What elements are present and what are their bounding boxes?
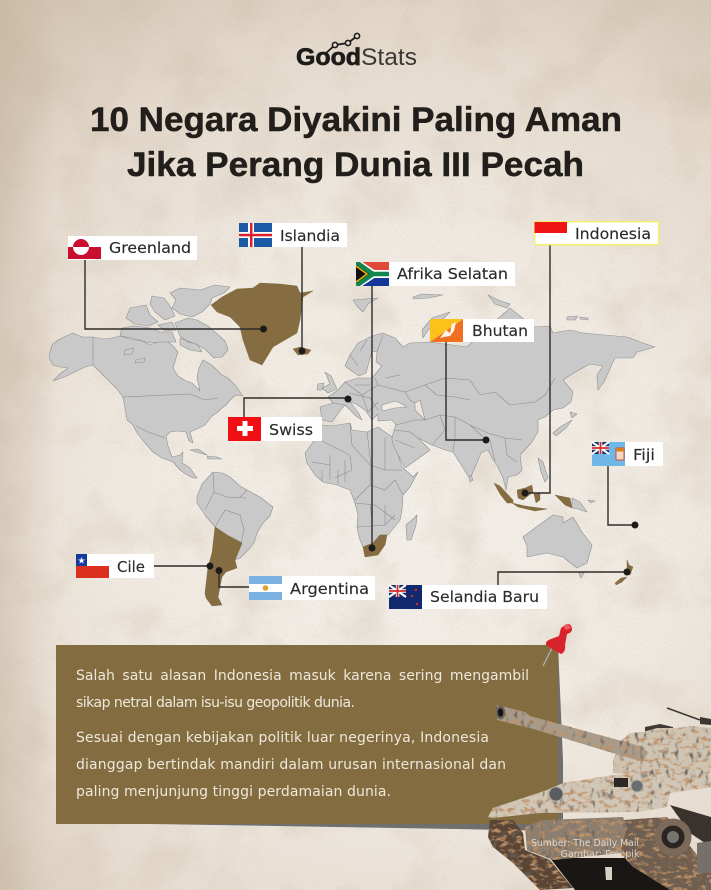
map: Greenland highlighted: [211, 283, 313, 365]
map: Australia: [523, 515, 592, 578]
tank: hatch: [614, 778, 628, 787]
text: second paragraph: Sesuai dengan kebijakan politik luar negerinya, Indonesia: [76, 730, 489, 746]
text: first paragraph: sikap netral dalam isu-isu geopolitik dunia.: [76, 695, 355, 711]
title: 10 Negara Diyakini Paling Aman: [90, 101, 622, 139]
source credit: [531, 838, 640, 860]
tank: cupola: [645, 724, 673, 733]
map: Canadian Arctic islands: [120, 285, 230, 363]
label: Bhutan: Bhutan: [472, 322, 528, 340]
map: Caribbean: [190, 449, 222, 459]
text: second paragraph: [76, 730, 506, 800]
panel shadow: [150, 645, 563, 831]
map: South America: [197, 472, 273, 560]
map: Japan: [553, 412, 577, 436]
label: Argentina: Argentina: [290, 580, 369, 598]
tank: antenna: [667, 708, 700, 720]
logo: GoodStats: Stats: [361, 44, 417, 71]
map: borders: [93, 335, 555, 543]
panel: explanation: [56, 645, 563, 831]
tank: right track: [620, 817, 711, 890]
map: UK and Ireland: [317, 372, 337, 393]
label: Fiji: Fiji: [633, 446, 655, 464]
source credit: Gambar: Freepik: [560, 849, 640, 860]
map: Iceland highlighted: [293, 347, 311, 355]
tank: rear wheels: [697, 841, 711, 873]
label: Islandia: [239, 223, 347, 354]
label: Cile: Cile: [117, 558, 145, 576]
logo: GoodStats: Good: [296, 44, 361, 71]
leader line: Greenland: [85, 259, 264, 329]
map: Papua New Guinea: [572, 498, 595, 512]
tank: upper right track: [670, 805, 711, 847]
label: Swiss: [228, 396, 352, 441]
text: first paragraph: Salah satu alasan Indonesia masuk karena sering mengambil: [76, 668, 529, 684]
map: Africa: [305, 423, 418, 547]
label: Cile: ★: [77, 556, 86, 566]
tank: headlights: [549, 787, 563, 801]
world map: [49, 283, 655, 606]
tank: undercarriage: [550, 858, 670, 890]
label: Afrika Selatan: Afrika Selatan: [397, 265, 508, 283]
illustration: rusty tank: [488, 705, 711, 890]
label: Argentina: [216, 567, 375, 600]
tank: hull deck: [488, 770, 711, 818]
tank: gap between wheels: [605, 867, 612, 880]
label: Indonesia: [522, 222, 659, 496]
map: Indonesia highlighted: [494, 483, 572, 511]
map: Madagascar: [406, 515, 417, 540]
label: Fiji: [592, 442, 663, 528]
text: second paragraph: dianggap bertindak mandiri dalam urusan internasional dan: [76, 757, 506, 773]
label: Cile: [76, 554, 214, 578]
text: second paragraph: paling menjunjung tinggi perdamaian dunia.: [76, 784, 391, 800]
tank: gun barrel: [497, 705, 648, 761]
icon: red push pin: [543, 624, 572, 666]
map: Philippines and Sri Lanka: [469, 458, 548, 482]
map: Argentina and Chile highlighted: [205, 527, 242, 606]
tank: hull lower front: [525, 817, 627, 860]
map: New Zealand highlighted: [615, 560, 633, 585]
map: South Africa highlighted: [363, 535, 387, 557]
logo: GoodStats: [296, 33, 417, 71]
label: Greenland: [68, 236, 267, 332]
label: Bhutan: [430, 319, 534, 444]
tank: turret: [613, 726, 711, 775]
label: Indonesia: Indonesia: [575, 225, 651, 243]
tank: left track: [488, 820, 573, 890]
label: Selandia Baru: [389, 568, 630, 609]
title: Jika Perang Dunia III Pecah: [127, 146, 584, 184]
map: Eurasia: [320, 308, 655, 490]
label: Selandia Baru: Selandia Baru: [430, 588, 539, 606]
map: North America: [49, 333, 243, 478]
label: Swiss: Swiss: [269, 421, 313, 439]
source credit: Sumber: The Daily Mail: [531, 838, 639, 849]
label: Islandia: Islandia: [280, 227, 340, 245]
tank: sprocket wheel: [658, 822, 688, 852]
text: first paragraph: [76, 668, 529, 711]
title: [90, 101, 622, 184]
label: Greenland: Greenland: [109, 239, 191, 257]
label: Afrika Selatan: [356, 259, 515, 552]
map: Svalbard and Arctic islands: [353, 294, 588, 338]
